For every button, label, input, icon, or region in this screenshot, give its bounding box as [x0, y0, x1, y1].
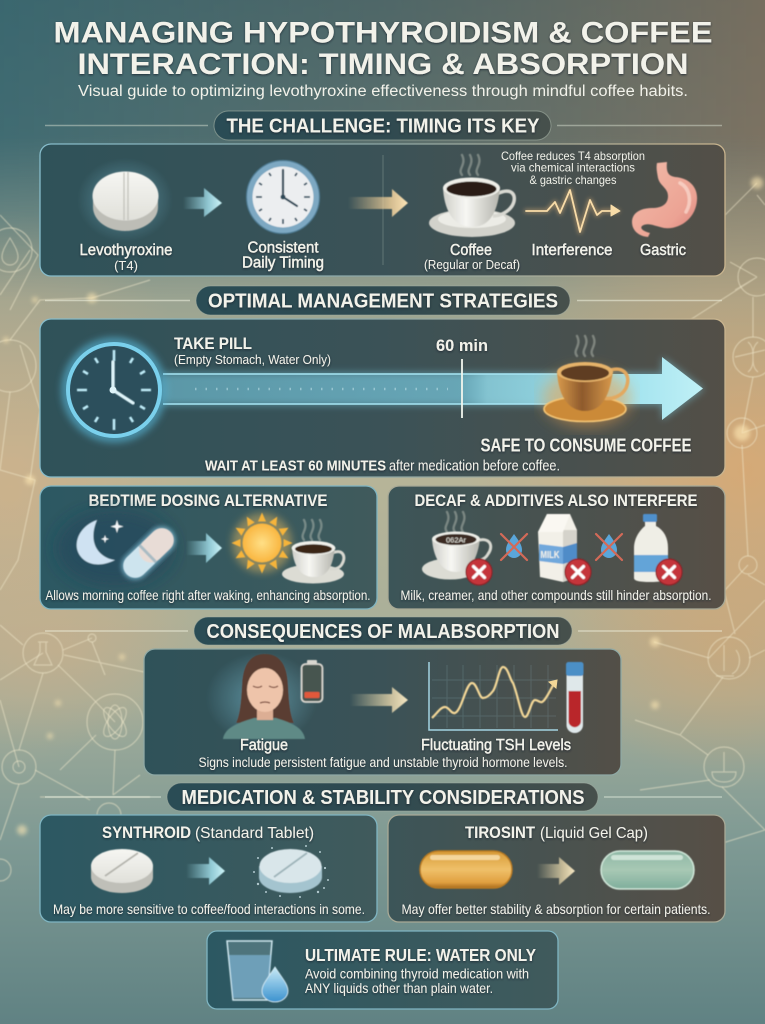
panel: bedtime dosing [40, 486, 377, 609]
arrow: tan [537, 857, 575, 885]
title: INTERACTION: TIMING & ABSORPTION [78, 48, 688, 81]
labels: challenge row: Interference [532, 242, 612, 259]
icon: glowing clock [66, 342, 162, 438]
heading: optimal management [45, 286, 722, 315]
icon: creamer jug with x [634, 514, 682, 585]
heading: synthroid: SYNTHROID [102, 824, 191, 842]
icon: moon and stars [55, 508, 175, 588]
icon: decaf cup with x [422, 512, 492, 585]
arrow: blue [186, 857, 225, 885]
caption: synthroid: May be more sensitive to coffee/food interactions in some. [53, 901, 365, 917]
caption: coffee reduces absorption: Coffee reduces T4 absorption [501, 149, 645, 163]
icon: stomach [632, 162, 697, 237]
heading: optimal management: OPTIMAL MANAGEMENT STRATEGIES [208, 290, 558, 312]
arrow: tan [350, 687, 408, 713]
background glow nodes [3, 177, 763, 835]
caption: wait 60 minutes: WAIT AT LEAST 60 MINUTES [205, 458, 386, 474]
icon: low battery [302, 660, 322, 702]
labels: challenge row: Daily Timing [242, 254, 324, 272]
heading: consequences [45, 617, 722, 645]
panel: timeline [40, 319, 725, 477]
caption: wait 60 minutes [205, 458, 560, 474]
caption: wait 60 minutes: after medication before coffee. [389, 458, 560, 474]
heading: tirosint: (Liquid Gel Cap) [540, 825, 648, 842]
panel: decaf and additives [388, 486, 725, 609]
label: 60 min: 60 min [436, 337, 488, 355]
icon: coffee cup [429, 155, 515, 237]
label: take pill: (Empty Stomach, Water Only) [174, 352, 331, 367]
heading: tirosint: TIROSINT [465, 824, 535, 842]
caption: coffee reduces absorption: via chemical interactions [511, 160, 635, 174]
caption: tirosint: May offer better stability & absorption for certain patients. [402, 901, 710, 917]
chart: fluctuating TSH [429, 662, 558, 730]
labels: challenge row: Coffee [450, 242, 492, 259]
text: ultimate rule body: Avoid combining thyroid medication with [305, 966, 529, 982]
heading: the challenge: THE CHALLENGE: TIMING ITS KEY [226, 116, 540, 138]
icon: white tablet [91, 849, 153, 893]
heading: synthroid [102, 824, 314, 842]
arrow: blue [186, 533, 222, 563]
icon: blood test tube [566, 662, 584, 733]
icon: levothyroxine tablet [77, 158, 173, 242]
labels: challenge row [80, 240, 686, 273]
heading: decaf: DECAF & ADDITIVES ALSO INTERFERE [414, 492, 698, 510]
labels: challenge row: Consistent [248, 240, 319, 256]
subtitle: Visual guide to optimizing levothyroxine effectiveness through mindful coffee habits. [78, 83, 688, 100]
label: take pill [174, 334, 331, 367]
background molecular network [0, 183, 765, 881]
title [54, 16, 712, 81]
icon: sun [232, 512, 292, 574]
panel: tirosint [388, 815, 725, 922]
icon: tired woman [206, 652, 318, 744]
labels: challenge row: (T4) [114, 258, 138, 273]
heading: ultimate rule: ULTIMATE RULE: WATER ONLY [305, 945, 536, 965]
panel: synthroid [40, 815, 377, 922]
labels: consequences: Fatigue [240, 737, 288, 754]
icon: dissolving tablet [253, 845, 329, 898]
icon: morning coffee [282, 520, 344, 584]
heading: medication [45, 783, 722, 811]
arrow: timeline band [163, 357, 704, 420]
arrow: blue [183, 188, 222, 217]
icon: crossed drop [596, 534, 622, 560]
caption: coffee reduces absorption [501, 149, 645, 187]
icon: crossed drop [501, 534, 527, 560]
heading: bedtime: BEDTIME DOSING ALTERNATIVE [88, 492, 328, 510]
heading: consequences: CONSEQUENCES OF MALABSORPTION [206, 621, 560, 643]
icon: green gel capsule [601, 851, 694, 889]
icon: gold gel capsule [420, 851, 512, 888]
caption: consequences: Signs include persistent fatigue and unstable thyroid hormone levels. [198, 755, 568, 770]
icon: clock [246, 160, 320, 234]
arrow: orange [348, 189, 408, 217]
labels: consequences: Fluctuating TSH Levels [421, 737, 571, 754]
icon: interference pulse [526, 190, 620, 232]
icon: capsule [115, 520, 182, 586]
icon: decaf cup with x: 062Ar [446, 536, 467, 544]
label: safe to consume coffee: SAFE TO CONSUME COFFEE [480, 436, 692, 456]
caption: decaf: Milk, creamer, and other compounds still hinder absorption. [400, 587, 712, 603]
icon: glass of water and drop [227, 941, 288, 1002]
icon: milk carton with x [538, 514, 591, 585]
labels: challenge row: (Regular or Decaf) [424, 257, 520, 272]
heading: medication: MEDICATION & STABILITY CONSIDERATIONS [182, 787, 584, 809]
labels: consequences [240, 737, 571, 754]
heading: synthroid: (Standard Tablet) [195, 825, 314, 842]
icon: glowing coffee cup [543, 336, 631, 426]
labels: challenge row: Levothyroxine [80, 242, 172, 259]
heading: the challenge [45, 111, 722, 140]
panel: ultimate rule [207, 931, 558, 1009]
panel: the challenge [40, 144, 725, 276]
heading: tirosint [465, 824, 648, 842]
panel: consequences [144, 649, 621, 775]
caption: bedtime: Allows morning coffee right after waking, enhancing absorption. [46, 587, 370, 603]
caption: coffee reduces absorption: & gastric changes [530, 173, 616, 187]
title: MANAGING HYPOTHYROIDISM & COFFEE [54, 16, 712, 50]
labels: challenge row: Gastric [640, 242, 686, 259]
text: ultimate rule body [305, 966, 529, 996]
text: ultimate rule body: ANY liquids other than plain water. [305, 980, 493, 996]
label: take pill: TAKE PILL [174, 334, 252, 353]
icon: milk carton with x: MILK [540, 550, 560, 561]
